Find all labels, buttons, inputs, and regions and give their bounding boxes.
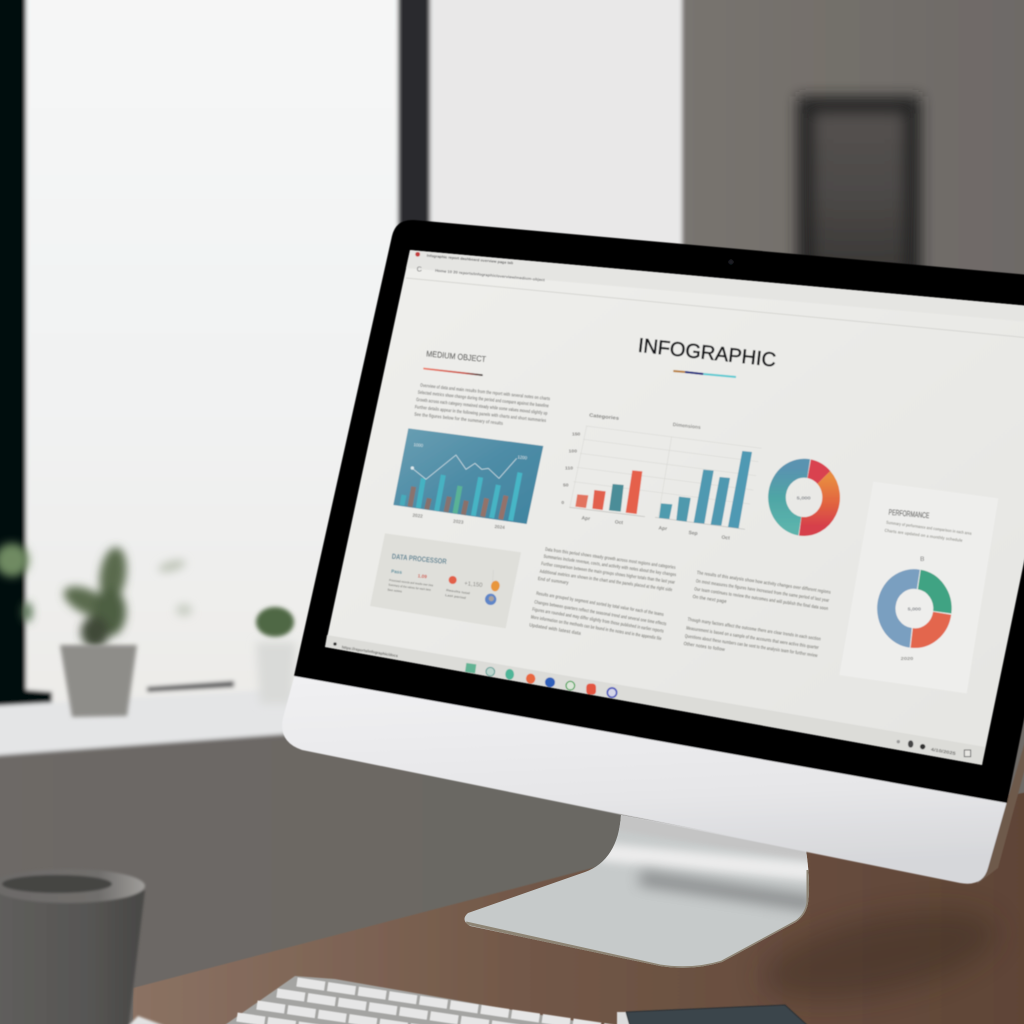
line 2: On most measures the figures have increased from the same period of last year <box>695 578 830 604</box>
red and teal bars left <box>575 494 588 508</box>
potted plants on sill <box>0 543 296 717</box>
green icon <box>505 669 514 680</box>
line 1: The results of this analysis show how activity changes over different regions <box>696 570 831 596</box>
line 3: Figures are rounded and may differ slightly from those published in earlier reports <box>532 607 664 635</box>
small label teal: Pass <box>391 569 403 575</box>
key row 2 <box>277 993 560 1024</box>
bar 6 <box>676 497 691 522</box>
back arrow: C <box>417 264 423 273</box>
red top <box>809 469 824 477</box>
base bottom edge <box>466 870 808 968</box>
clock text: 4/10/2025 <box>930 747 957 756</box>
line 2: Selected metrics show change during the period and compare against the baseline <box>417 390 549 409</box>
baseline <box>569 507 745 529</box>
status bar url <box>333 642 399 658</box>
orange marker <box>490 580 501 592</box>
value text: +1,150 <box>464 581 483 589</box>
url text: https://reports/infographic/docs <box>342 644 399 658</box>
donut segments <box>886 579 942 638</box>
grey-teal icon <box>486 667 495 676</box>
right text block two <box>683 617 821 659</box>
performance panel <box>839 482 998 693</box>
x axis labels <box>581 515 730 542</box>
battery icon <box>920 744 925 749</box>
blue outline icon <box>607 688 617 697</box>
panel small text: Processed records and results over time <box>389 578 434 587</box>
mug inside <box>2 875 112 893</box>
keyboard <box>222 976 620 1024</box>
panel small text <box>387 578 434 593</box>
coffee mug <box>0 869 145 1024</box>
line 3: Growth across each category remained steady while some values moved slightly up <box>416 397 548 417</box>
donut two caption: 2020 <box>901 656 914 661</box>
panel small text: See notes <box>387 588 403 593</box>
donut segments <box>777 468 831 526</box>
keyboard base <box>222 976 610 1024</box>
donut chart two <box>886 579 942 638</box>
right region drawn at 3x crop coordinates <box>683 468 998 757</box>
left heading: MEDIUM OBJECT <box>426 348 486 364</box>
bar 2 <box>592 490 606 510</box>
red segment <box>912 613 942 638</box>
toolbar divider <box>406 278 1024 338</box>
small value red: 1.09 <box>418 573 428 579</box>
lower wall <box>0 700 700 1024</box>
line 4: Other notes to follow <box>683 641 725 653</box>
line 1: Though many factors affect the outcome there are clear trends in each section <box>687 617 821 643</box>
window close dot <box>415 252 420 257</box>
bright window <box>26 0 398 710</box>
monitor body <box>282 220 1024 884</box>
line 3: Questions about these numbers can be sent to the analysis team for further review <box>684 633 818 659</box>
donut chart one <box>777 468 831 526</box>
small plant pot <box>256 642 296 704</box>
blue icon <box>545 677 555 687</box>
white trend line <box>412 455 517 479</box>
panel heading: PERFORMANCE <box>888 508 930 520</box>
donut one centre value: 5,000 <box>797 496 811 502</box>
line 2: Measurement is based on a sample of the accounts that were active this quarter <box>686 625 819 651</box>
line 1: Overview of data and main results from the report with several notes on charts <box>420 383 551 402</box>
value label left: 1000 <box>413 442 424 448</box>
blue circle icon <box>485 594 496 605</box>
key row 4 <box>237 1017 340 1024</box>
phone on desk <box>617 1005 808 1024</box>
centre text block two <box>529 591 667 642</box>
keyboard corner left <box>128 1016 165 1024</box>
mug body <box>0 890 145 1024</box>
line 5: End of summary <box>537 576 569 586</box>
y axis labels: 110 <box>565 466 573 472</box>
browser title bar <box>406 250 1024 322</box>
bar chart <box>561 413 762 542</box>
phone edge <box>617 1012 630 1024</box>
panel heading: DATA PROCESSOR <box>391 552 448 566</box>
dark window mullion <box>397 0 430 360</box>
bar 9 <box>728 451 752 528</box>
orange marker stem <box>492 570 494 583</box>
screen background <box>325 250 1024 765</box>
y axis labels: 50 <box>563 483 569 489</box>
line 4: More information on the methods can be found in the notes and in the appendix file <box>530 614 662 642</box>
green outline icon <box>566 681 575 690</box>
tab title: Infographic report dashboard overview page tab <box>427 254 514 265</box>
label 3: 2024 <box>494 524 505 530</box>
orange to red <box>800 477 831 526</box>
mug rim <box>0 869 145 903</box>
blue inner <box>489 596 494 601</box>
line 4: Further details appear in the following panels with charts and short summaries <box>414 404 547 424</box>
red icon <box>586 684 596 695</box>
grey wall right <box>680 0 1024 860</box>
neck highlight <box>600 852 815 872</box>
small caption: Last period <box>445 593 466 600</box>
left heading underline <box>423 368 483 376</box>
neck dark band <box>640 878 815 904</box>
stand neck and base <box>464 815 810 968</box>
right text block one <box>692 570 831 612</box>
line 3: Our team continues to review the outcomes and will publish the final data soon <box>694 586 828 612</box>
x axis labels: Oct <box>614 519 624 526</box>
frame interior <box>808 104 912 274</box>
left plant pot <box>60 645 137 717</box>
key row 1 <box>297 982 620 1024</box>
underline navy <box>685 372 703 374</box>
sill shadow line <box>147 681 234 692</box>
lock icon <box>333 642 337 646</box>
phone screen <box>626 1005 808 1024</box>
notification icon <box>964 750 971 757</box>
panel background <box>393 428 543 524</box>
line 4: Additional metrics are shown in the chart and the panels placed at the right side <box>539 569 673 593</box>
data processor panel <box>370 533 521 628</box>
y axis labels: 100 <box>569 449 577 455</box>
title underline <box>673 371 736 377</box>
chart heading left: Categories <box>589 413 620 422</box>
main title: INFOGRAPHIC <box>637 335 777 372</box>
line 1: Results are grouped by segment and sorted by total value for each of the teams <box>536 591 664 618</box>
x axis labels: Apr <box>658 525 667 532</box>
screen content <box>325 250 1024 765</box>
line 5: See the figures below for the summary of results <box>414 412 503 427</box>
y axis labels: 0 <box>561 500 564 506</box>
x axis labels: Apr <box>581 515 590 522</box>
small caption: Results total <box>446 588 470 595</box>
panel small text: Summary of the values for each item <box>388 583 431 592</box>
window sill <box>0 688 300 758</box>
trend start marker <box>411 466 414 470</box>
gridlines <box>570 426 762 517</box>
address bar text: Home 10 20 reports/infographic/overview/medium-object <box>435 269 546 282</box>
red dot icon <box>449 576 457 584</box>
blue segment <box>886 579 918 638</box>
bar 3 <box>609 484 624 512</box>
blue outer <box>485 594 496 605</box>
plant foliage <box>0 543 192 648</box>
rear edge of monitor <box>977 725 1024 884</box>
underline cyan <box>703 374 736 377</box>
label 2: 2023 <box>453 519 464 525</box>
white chin <box>282 670 1008 884</box>
label 1: 2022 <box>412 513 423 519</box>
small chart label: B <box>920 556 925 563</box>
y axis labels: 150 <box>572 432 581 438</box>
donut two centre value: 5,000 <box>908 607 921 613</box>
underline orange <box>673 371 685 372</box>
frame border <box>806 105 912 280</box>
teal half <box>777 468 809 526</box>
webcam <box>728 260 734 264</box>
value label right: 1200 <box>517 454 528 460</box>
green segment <box>919 580 942 612</box>
panel text line 2: Charts are updated on a monthly schedule <box>884 528 963 543</box>
line 3: Further comparison between the main groups shows higher totals than the last year <box>541 561 675 586</box>
monitor stand <box>464 815 810 968</box>
bar 8 <box>711 477 730 526</box>
x axis labels: Oct <box>721 535 730 542</box>
y axis labels <box>561 432 581 506</box>
wifi icon <box>897 740 900 743</box>
black bezel <box>294 220 1024 803</box>
panel background <box>370 533 521 628</box>
taskbar icons <box>465 663 617 697</box>
line 2: Summaries include revenue, costs, and activity with notes about the key changes <box>543 554 677 578</box>
wooden desk <box>133 790 1024 1024</box>
bar 5 <box>659 503 672 519</box>
teal line and bar chart panel <box>393 428 543 524</box>
top left region drawn at 3x crop coordinates <box>393 252 777 542</box>
teal and brown bars <box>402 473 520 521</box>
bar 7 <box>694 470 714 524</box>
small caption <box>445 588 470 600</box>
status bar right icons <box>897 740 971 757</box>
line 2: Changes between quarters reflect the seasonal trend and several one time effects <box>534 599 667 627</box>
panel background <box>839 482 998 693</box>
white wall <box>430 0 682 360</box>
x axis labels: Sep <box>688 530 698 537</box>
chart heading right: Dimensions <box>672 422 701 431</box>
teal chart axis labels <box>412 513 505 530</box>
line 1: Data from this period shows steady growth across most regions and categories <box>545 547 676 571</box>
orange icon <box>526 674 535 684</box>
neck top shade <box>618 815 808 860</box>
stand shadow on desk <box>755 893 1005 1017</box>
dark window frame left <box>0 0 52 706</box>
line 5: Updated with latest data <box>529 622 581 637</box>
picture frame on wall <box>806 104 912 280</box>
bar 4 <box>626 470 642 514</box>
panel text line 1: Summary of performance and comparison in each area <box>886 520 972 536</box>
lower left region drawn at 3x crop coordinates <box>333 533 677 697</box>
green tile icon <box>465 663 476 673</box>
line 4: On the next page <box>692 594 727 605</box>
small plant leaves <box>256 607 294 637</box>
intro paragraph <box>414 383 551 427</box>
key row 3 <box>257 1005 460 1024</box>
centre text block one <box>537 547 677 593</box>
speaker icon <box>908 740 913 748</box>
status bar <box>325 635 985 765</box>
